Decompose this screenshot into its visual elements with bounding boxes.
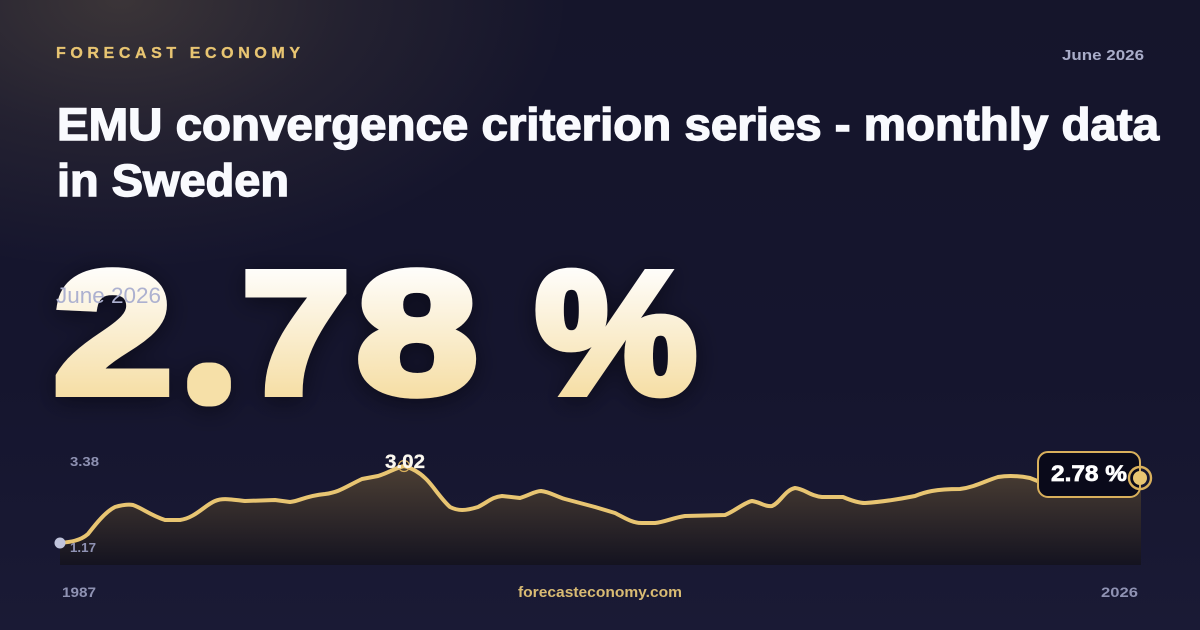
date, top right: June 2026 (1062, 47, 1144, 64)
big value: . (203, 352, 215, 396)
big value: 2 (54, 236, 172, 430)
date overlapping the value: June 2026 (56, 283, 161, 308)
x axis end year: 2026 (1101, 584, 1138, 600)
chart: line (60, 466, 1040, 543)
source site: forecasteconomy.com (518, 584, 682, 601)
axis max label: 3.38 (70, 454, 99, 469)
chart: area under the line (60, 466, 1141, 565)
big value (54, 236, 696, 430)
big value: 8 (357, 237, 477, 430)
big value: % (536, 237, 696, 430)
axis min label: 1.17 (70, 540, 96, 555)
current value marker (1129, 467, 1151, 489)
big value: 7 (242, 236, 350, 429)
start point marker (54, 538, 66, 548)
brand label: FORECAST ECONOMY (56, 45, 300, 62)
current value callout (1038, 452, 1140, 497)
current value callout: 2.78 % (1051, 461, 1127, 486)
title (57, 99, 1160, 206)
peak value label: 3.02 (385, 452, 425, 473)
x axis start year: 1987 (62, 584, 96, 600)
peak marker (398, 460, 410, 472)
title: EMU convergence criterion series - monthly data (57, 99, 1160, 150)
title: in Sweden (57, 155, 289, 206)
